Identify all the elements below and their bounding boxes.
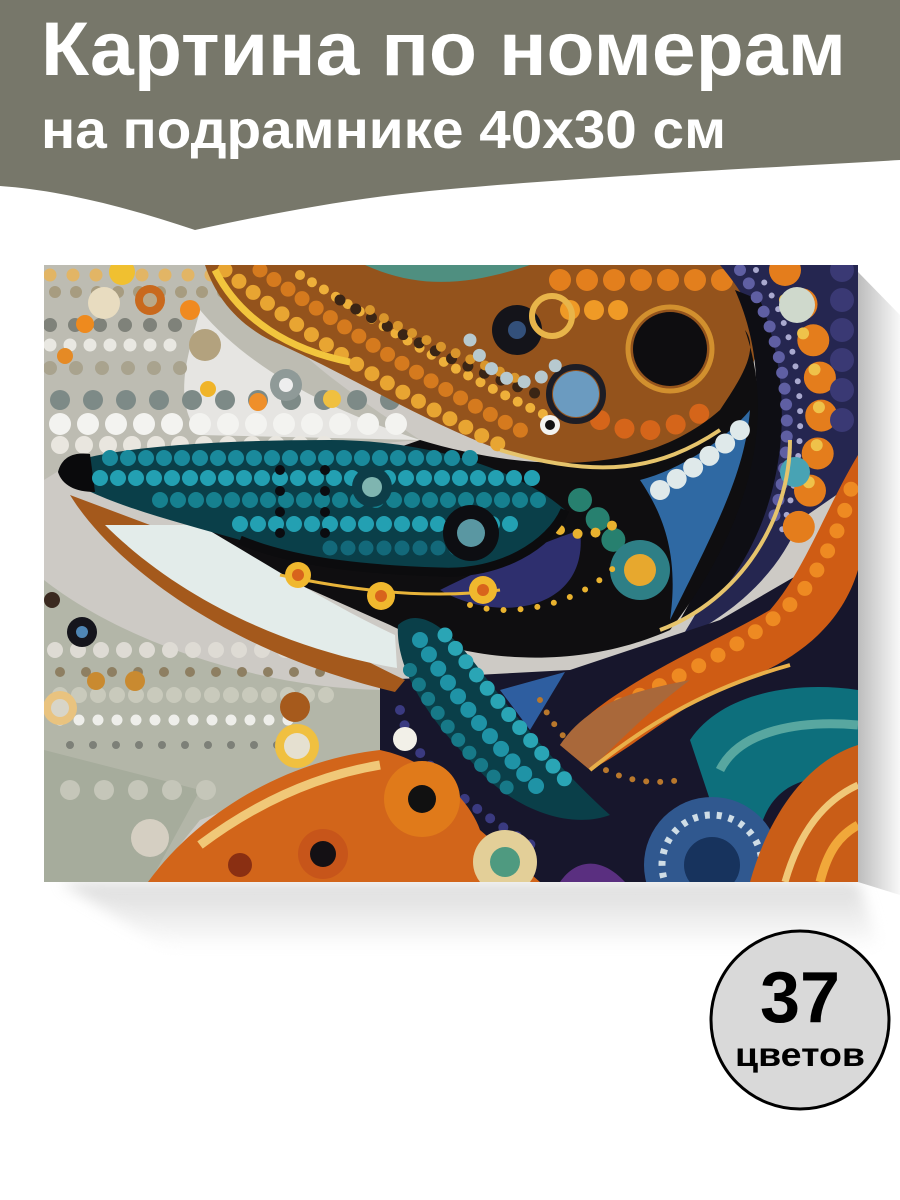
- whale teal head and back: [58, 440, 565, 572]
- bottom right swirls: [560, 687, 858, 882]
- number 37: 37: [760, 958, 840, 1038]
- whale teal flipper: [398, 618, 610, 820]
- title: Картина по номерам: [41, 7, 846, 92]
- right orange tentacle: [560, 455, 858, 770]
- subtitle: на подрамнике 40х30 см: [41, 100, 726, 160]
- top orange ornamental mass: [205, 265, 762, 466]
- canvas shadow: [60, 272, 900, 950]
- colors count badge: [711, 931, 889, 1109]
- painting: whale on canvas: [43, 259, 858, 933]
- header banner: [0, 0, 900, 230]
- gold spots under whale: [280, 562, 500, 610]
- bottom orange shape with eyes: [148, 750, 540, 894]
- lower-right dark ground: [380, 540, 858, 882]
- right swirl bands: [680, 265, 858, 640]
- label цветов: цветов: [735, 1036, 865, 1073]
- lower-left background: [43, 580, 390, 882]
- speckled upper-left background: [44, 259, 420, 480]
- whale white belly: [70, 495, 405, 692]
- dark whale lower body: [190, 330, 790, 658]
